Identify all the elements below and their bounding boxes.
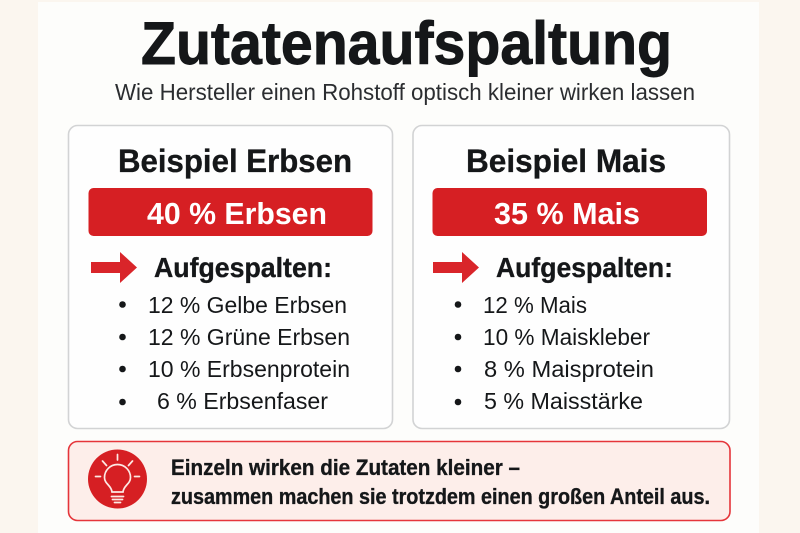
icon: light bulb — [88, 450, 147, 508]
banner: 35 % Mais — [432, 188, 707, 236]
ingredient list: 12 % Gelbe Erbsen — [148, 292, 347, 318]
title: Zutatenaufspaltung — [141, 10, 672, 77]
heading: Beispiel Erbsen: Beispiel Erbsen — [118, 143, 352, 179]
subtitle: Wie Hersteller einen Rohstoff optisch kleiner wirken lassen — [115, 79, 695, 105]
arrow — [91, 252, 137, 283]
callout text: zusammen machen sie trotzdem einen großen Anteil aus. — [171, 484, 710, 509]
ingredient list: 10 % Maiskleber — [483, 324, 650, 350]
ingredient list: 8 % Maisprotein — [484, 356, 654, 382]
callout text — [171, 455, 710, 509]
heading: Beispiel Mais: Beispiel Mais — [466, 143, 666, 179]
arrow — [433, 252, 479, 283]
panel: Beispiel Mais — [413, 126, 730, 428]
ingredient list — [455, 292, 654, 414]
banner: 40 % Erbsen: 40 % Erbsen — [147, 196, 327, 231]
banner: 40 % Erbsen — [88, 188, 372, 236]
ingredient list: 10 % Erbsenprotein — [148, 356, 350, 382]
ingredient list: 5 % Maisstärke — [484, 388, 643, 414]
ingredient list: 12 % Mais — [483, 292, 587, 318]
panel: Beispiel Erbsen — [68, 126, 392, 428]
callout text: Einzeln wirken die Zutaten kleiner – — [171, 455, 520, 480]
ingredient list — [119, 292, 350, 414]
ingredient list: 6 % Erbsenfaser — [157, 388, 328, 414]
subheading: Aufgespalten: Aufgespalten: — [496, 252, 673, 283]
callout — [68, 442, 730, 520]
subheading: Aufgespalten: Aufgespalten: — [154, 252, 332, 283]
banner: 35 % Mais: 35 % Mais — [494, 196, 640, 231]
ingredient list: 12 % Grüne Erbsen — [148, 324, 350, 350]
